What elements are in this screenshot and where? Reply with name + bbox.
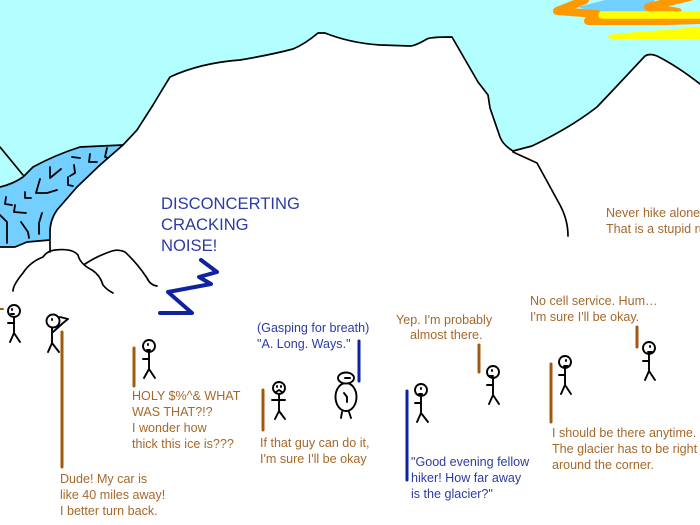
cracking noise heading: CRACKING	[161, 215, 249, 234]
speech: that guy: If that guy can do it,	[260, 436, 370, 450]
speech: right around the corner: The glacier has to be right	[552, 442, 698, 456]
cracking noise heading: NOISE!	[161, 236, 217, 255]
speech: right around the corner	[552, 426, 698, 472]
speech: turn back: I better turn back.	[60, 504, 158, 518]
bar: hiker 3	[132, 348, 136, 386]
speech: a long ways: (Gasping for breath)	[257, 321, 369, 335]
hiker 3	[143, 340, 155, 378]
speech: right around the corner: around the corner.	[552, 458, 654, 472]
speech: turn back: Dude! My car is	[60, 472, 147, 486]
right mountain ridge	[513, 54, 700, 151]
hiker 7	[559, 356, 571, 394]
bar: heavy hiker	[358, 341, 360, 381]
speech: that guy: I'm sure I'll be okay	[260, 452, 367, 466]
bar: hiker 6	[478, 345, 480, 372]
speech: holy: HOLY $%^& WHAT	[132, 389, 241, 403]
speech: that guy	[260, 436, 370, 466]
speech: good evening	[411, 455, 530, 501]
speech: a long ways: "A. Long. Ways."	[257, 337, 351, 351]
speech: turn back: like 40 miles away!	[60, 488, 165, 502]
speech: good evening: is the glacier?"	[411, 487, 493, 501]
hiker 6	[487, 366, 499, 404]
speech: turn back	[60, 472, 165, 518]
cracking noise heading	[161, 194, 300, 255]
glacier	[0, 145, 123, 247]
speech: almost there	[396, 313, 493, 342]
glacier outline	[0, 145, 123, 252]
speech: right around the corner: I should be there anytime.	[552, 426, 696, 440]
sky	[0, 0, 700, 187]
bar: hiker 4	[262, 390, 264, 430]
hiker 8	[643, 342, 655, 380]
speech: good evening: hiker! How far away	[411, 471, 522, 485]
hiker 2 shading eyes	[46, 314, 68, 352]
speech: no cell service: No cell service. Hum…	[530, 294, 658, 308]
speech: good evening: "Good evening fellow	[411, 455, 530, 469]
hills	[13, 250, 157, 293]
bar: hiker 2	[60, 332, 64, 467]
icon: crack zigzag	[160, 260, 217, 313]
speech: holy: I wonder how	[132, 421, 208, 435]
left mountain edge	[0, 147, 23, 175]
cracking noise heading: DISCONCERTING	[161, 194, 300, 213]
bar: hiker 5	[406, 391, 408, 480]
speech: holy	[132, 389, 241, 451]
speech: almost there: Yep. I'm probably	[396, 313, 493, 327]
speech: almost there: almost there.	[410, 328, 483, 342]
speech: no cell service: I'm sure I'll be okay.	[530, 310, 639, 324]
speech: holy: WAS THAT?!?	[132, 405, 213, 419]
bar: hiker 8	[636, 327, 638, 347]
mountain base line	[513, 152, 568, 236]
speech: never hike alone	[606, 206, 700, 236]
speech: no cell service	[530, 294, 658, 324]
speech: holy: thick this ice is???	[132, 437, 234, 451]
speech: a long ways	[257, 321, 369, 351]
hiker 5	[415, 384, 428, 422]
heavy hiker	[336, 372, 356, 418]
glacier cracks	[0, 148, 108, 243]
sun	[557, 0, 700, 39]
hiker 1	[0, 305, 20, 342]
bar: hiker 7	[550, 364, 552, 422]
main mountain ridge	[123, 33, 513, 151]
hiker 4 frowning	[272, 382, 285, 419]
